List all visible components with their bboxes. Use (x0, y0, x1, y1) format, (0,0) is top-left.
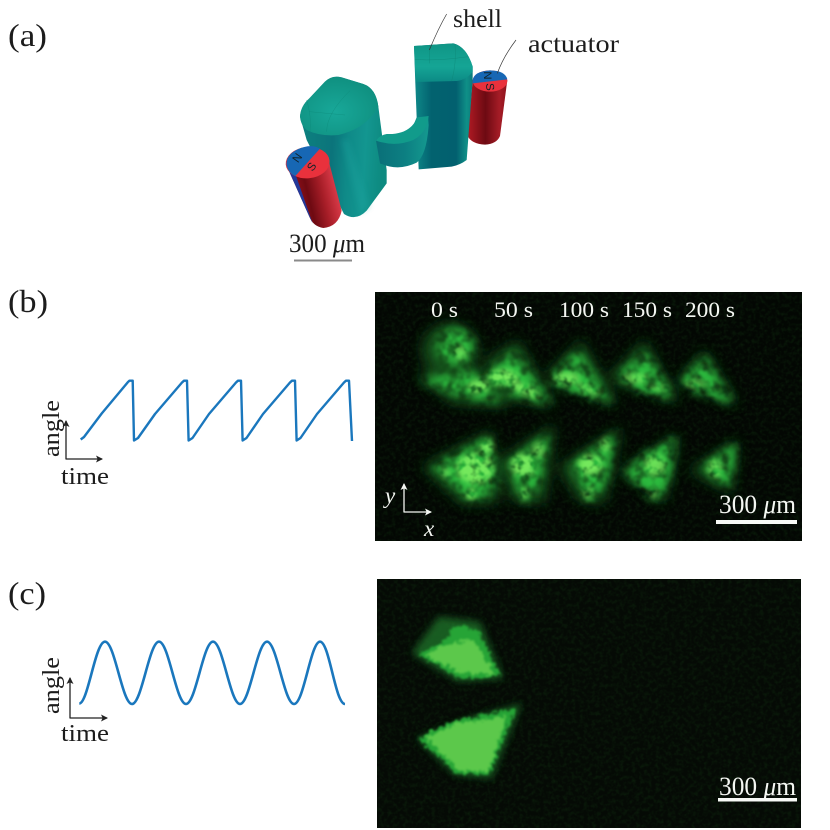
scale bar label a: 300 μm (289, 229, 365, 258)
scale bar c (718, 798, 797, 802)
axes arrows (65, 421, 67, 459)
panel label (a): (a) (8, 17, 47, 53)
left actuator magnet: S (305, 160, 320, 174)
label: shell: shell (453, 6, 502, 33)
time labels: 50 s (494, 297, 533, 322)
axes arrows (69, 678, 71, 718)
dim halo (415, 323, 738, 503)
bright cores (441, 345, 722, 500)
panel label (b): (b) (8, 283, 48, 319)
panel: fluorescence image, static (377, 579, 801, 828)
sawtooth curve (81, 381, 352, 441)
scale bar label b: 300 μm (719, 490, 796, 519)
sensor grain (377, 579, 801, 828)
scale bar a (294, 260, 352, 262)
time labels: 150 s (622, 297, 672, 322)
xy axes: x (423, 516, 435, 541)
sine curve (79, 642, 345, 704)
sensor grain (375, 292, 802, 541)
right shell block (414, 43, 473, 169)
time labels: 100 s (559, 297, 609, 322)
axis label angle: angle (39, 657, 65, 714)
label: actuator: actuator (528, 31, 620, 58)
time labels: 200 s (685, 297, 735, 322)
chart: sawtooth angle vs time (39, 381, 352, 490)
green particle clusters (415, 323, 738, 503)
bridge connector (376, 116, 429, 167)
right actuator magnet (468, 70, 507, 145)
left actuator magnet (284, 145, 342, 228)
axis label angle: angle (39, 400, 65, 457)
leader lines (429, 14, 516, 73)
right actuator magnet: S (483, 83, 496, 92)
panel label (c): (c) (8, 575, 46, 611)
scale bar b (716, 520, 797, 524)
left shell block (300, 77, 387, 217)
axis label time: time (61, 464, 109, 490)
xy axes: y (383, 483, 396, 508)
left actuator magnet: N (291, 151, 305, 165)
green particle clusters (412, 617, 522, 778)
right actuator magnet: N (481, 71, 493, 80)
dark background (377, 579, 801, 828)
xy axes (383, 483, 435, 541)
saturated edge (418, 625, 515, 775)
panel: fluorescence image, time series (375, 292, 802, 541)
halo (412, 617, 522, 778)
3D model drawing (284, 14, 516, 228)
scale bar label c: 300 μm (719, 772, 796, 801)
chart: sinusoidal angle vs time (39, 642, 345, 747)
dark background (375, 292, 802, 541)
axis label time: time (61, 721, 109, 747)
mottled mid-tone signal (418, 328, 737, 503)
panel: 3D device schematic (284, 6, 620, 262)
saturated triangles (425, 640, 507, 772)
time labels (431, 297, 735, 322)
time labels: 0 s (431, 297, 458, 322)
